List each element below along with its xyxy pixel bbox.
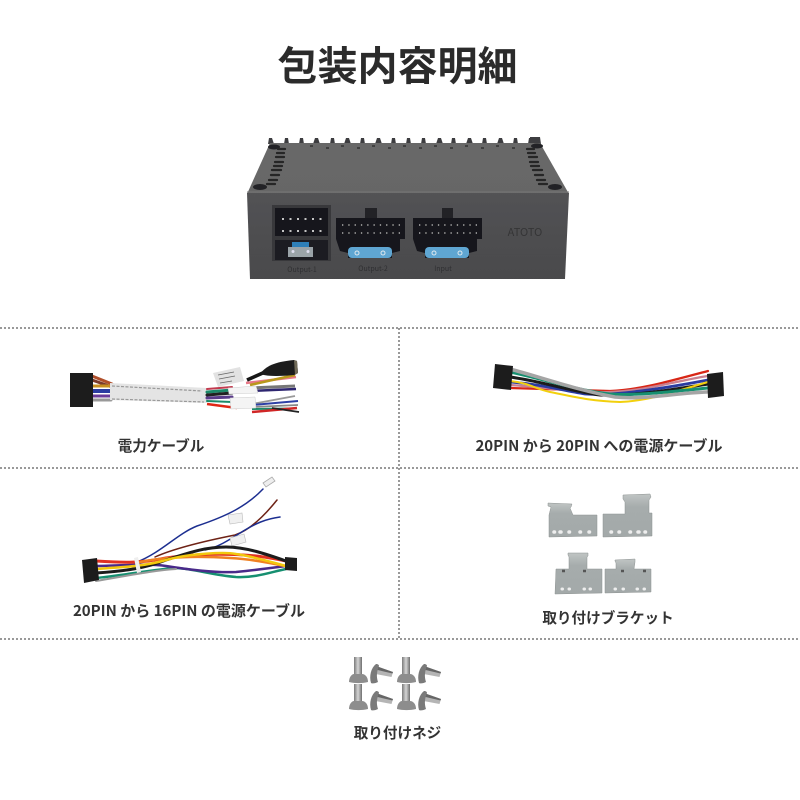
panel: power cable [70,360,299,456]
panel: mounting screws [349,657,442,743]
caption: 20PIN から 16PIN の電源ケーブル [73,600,305,621]
bracket image [548,494,652,594]
port labels [287,264,452,275]
screws image [349,657,441,710]
box top [247,143,569,194]
box fins [268,137,541,144]
box top screws [253,144,562,190]
brand: ATOTO: ATOTO [508,224,542,240]
box front [247,193,569,279]
port labels: Output-1 [287,265,317,275]
cable image [82,477,297,583]
port: Input [413,208,482,258]
cable image [70,360,299,412]
grid dividers [0,328,800,639]
port: Output-1 [272,205,331,261]
panel: 20PIN to 16PIN cable [73,477,305,621]
port: Output-2 [336,208,405,258]
box vents [267,149,547,184]
port labels: Output-2 [358,264,388,274]
panel: 20PIN to 20PIN cable [475,364,724,456]
product: amplifier box [247,137,569,279]
panel: mounting brackets [542,494,674,628]
port labels: Input [434,264,452,274]
caption: 電力ケーブル [118,435,205,456]
cable image [493,364,724,402]
caption: 取り付けブラケット [542,607,674,628]
title: 包装内容明細 [278,34,518,92]
caption: 20PIN から 20PIN への電源ケーブル [475,435,723,456]
caption: 取り付けネジ [354,722,442,743]
